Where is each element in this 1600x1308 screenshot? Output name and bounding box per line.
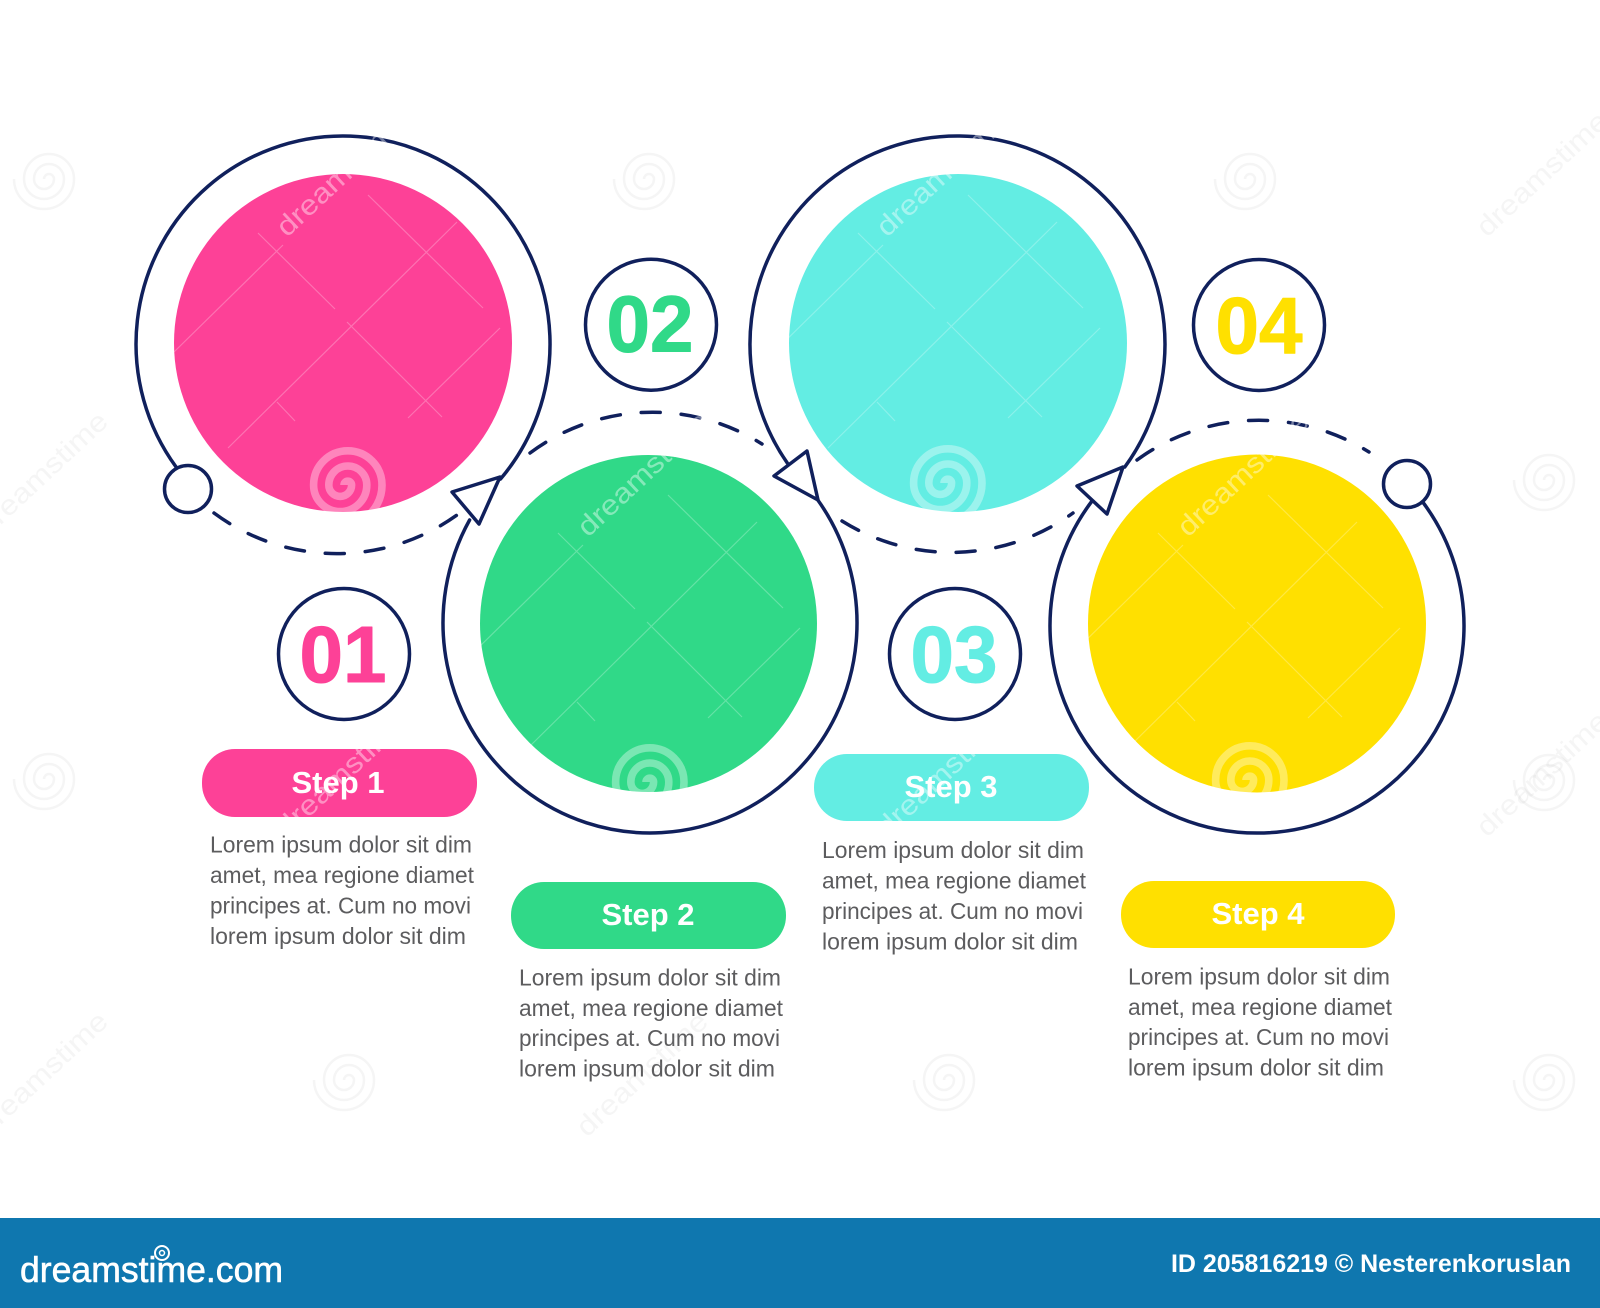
pill: Step 3: Step 3 <box>904 769 998 804</box>
step 2 panel <box>443 259 857 1082</box>
text block: step 2: Lorem ipsum dolor sit dim <box>519 964 781 990</box>
arrow: step 2 to step 3 <box>774 451 818 500</box>
text block: step 3: Lorem ipsum dolor sit dim <box>822 837 1084 863</box>
step 1 panel <box>136 136 550 949</box>
ring: step 1 dashed arc <box>214 513 457 554</box>
watermark overlay <box>0 105 1600 1142</box>
start node circle <box>164 466 212 512</box>
faint lattice lines over pink disc <box>174 195 500 448</box>
number badge 01 <box>278 588 410 720</box>
footer image id and credit: ID 205816219 © Nesterenkoruslan <box>1171 1250 1571 1278</box>
text block: step 3: amet, mea regione diamet <box>822 868 1087 894</box>
number badge 04: 04 <box>1216 281 1303 370</box>
pill: Step 1: Step 1 <box>291 765 385 800</box>
ring: step 4 dashed arc <box>1137 420 1369 460</box>
faint diagonal watermark words over discs: dreamstime <box>1171 405 1315 542</box>
ring: step 4 solid arc <box>1050 500 1464 833</box>
number badge 03 <box>890 588 1020 720</box>
faint lattice lines over yellow disc <box>1074 495 1400 748</box>
number badge 04 <box>1194 260 1324 390</box>
text block: step 1: amet, mea regione diamet <box>210 862 475 888</box>
end node circle <box>1384 460 1430 508</box>
text block: step 2: principes at. Cum no movi <box>519 1025 780 1051</box>
text block: step 3: principes at. Cum no movi <box>822 898 1083 924</box>
text block: step 4: principes at. Cum no movi <box>1128 1024 1389 1050</box>
ring: step 3 solid arc <box>750 136 1165 467</box>
pill: Step 1 <box>202 749 477 817</box>
faint diagonal watermark words on background <box>0 105 1600 1142</box>
number badge 01: 01 <box>300 610 386 699</box>
pill: Step 4 <box>1121 881 1395 948</box>
ring: step 3 dashed arc <box>842 513 1073 552</box>
pill: Step 2 <box>511 882 786 949</box>
footer banner <box>0 1218 1600 1308</box>
green disc <box>480 455 817 792</box>
step 4 panel <box>1050 260 1464 1080</box>
faint diagonal watermark words over discs: dreamstime <box>270 105 414 242</box>
ring: step 2 dashed arc <box>530 412 762 453</box>
faint lattice lines over cyan disc <box>774 195 1100 448</box>
ring: step 1 solid arc <box>136 136 550 479</box>
pill: Step 2: Step 2 <box>601 897 695 932</box>
faint diagonal watermark words on background: dreamstime <box>570 1005 714 1142</box>
number badge 02 <box>586 259 716 390</box>
text block: step 2 <box>519 964 784 1082</box>
number badge 03: 03 <box>910 610 998 699</box>
faint diagonal watermark words over discs: dreamstime <box>571 405 715 542</box>
white spirals over discs <box>314 449 1284 816</box>
faint diagonal watermark words on background: dreamstime <box>1470 105 1600 242</box>
text block: step 1: Lorem ipsum dolor sit dim <box>210 832 472 858</box>
faint lattice lines over green disc <box>474 495 800 748</box>
text block: step 1: lorem ipsum dolor sit dim <box>210 923 466 949</box>
faint diagonal watermark words over discs: dreamstime <box>870 705 1014 842</box>
text block: step 1: principes at. Cum no movi <box>210 892 471 918</box>
pink disc <box>174 174 512 512</box>
faint diagonal watermark words over discs <box>270 105 1315 842</box>
footer logo: dreamstime.com: dreamstime.com <box>20 1249 283 1290</box>
ring: step 2 solid arc <box>443 500 857 833</box>
faint diagonal watermark words on background: dreamstime <box>1470 705 1600 842</box>
pill: Step 3 <box>814 754 1089 821</box>
text block: step 3 <box>822 837 1087 954</box>
step 3 panel <box>750 136 1165 954</box>
pill: Step 4: Step 4 <box>1211 896 1305 931</box>
text block: step 2: amet, mea regione diamet <box>519 995 784 1021</box>
text block: step 3: lorem ipsum dolor sit dim <box>822 928 1078 954</box>
arrow: step 3 to step 4 <box>1077 467 1123 514</box>
text block: step 4 <box>1128 964 1393 1080</box>
text block: step 4: lorem ipsum dolor sit dim <box>1128 1054 1384 1080</box>
text block: step 4: Lorem ipsum dolor sit dim <box>1128 964 1390 990</box>
faint grey spirals on background <box>14 154 1574 1110</box>
arrow: step 1 to step 2 <box>452 477 500 524</box>
text block: step 4: amet, mea regione diamet <box>1128 994 1393 1020</box>
number badge 02: 02 <box>606 280 694 368</box>
yellow disc <box>1088 454 1426 792</box>
cyan disc <box>789 174 1127 512</box>
faint diagonal watermark words over discs: dreamstime <box>870 105 1014 242</box>
text block: step 1 <box>210 832 475 949</box>
text block: step 2: lorem ipsum dolor sit dim <box>519 1056 775 1082</box>
faint diagonal watermark words over discs: dreamstime <box>270 705 414 842</box>
